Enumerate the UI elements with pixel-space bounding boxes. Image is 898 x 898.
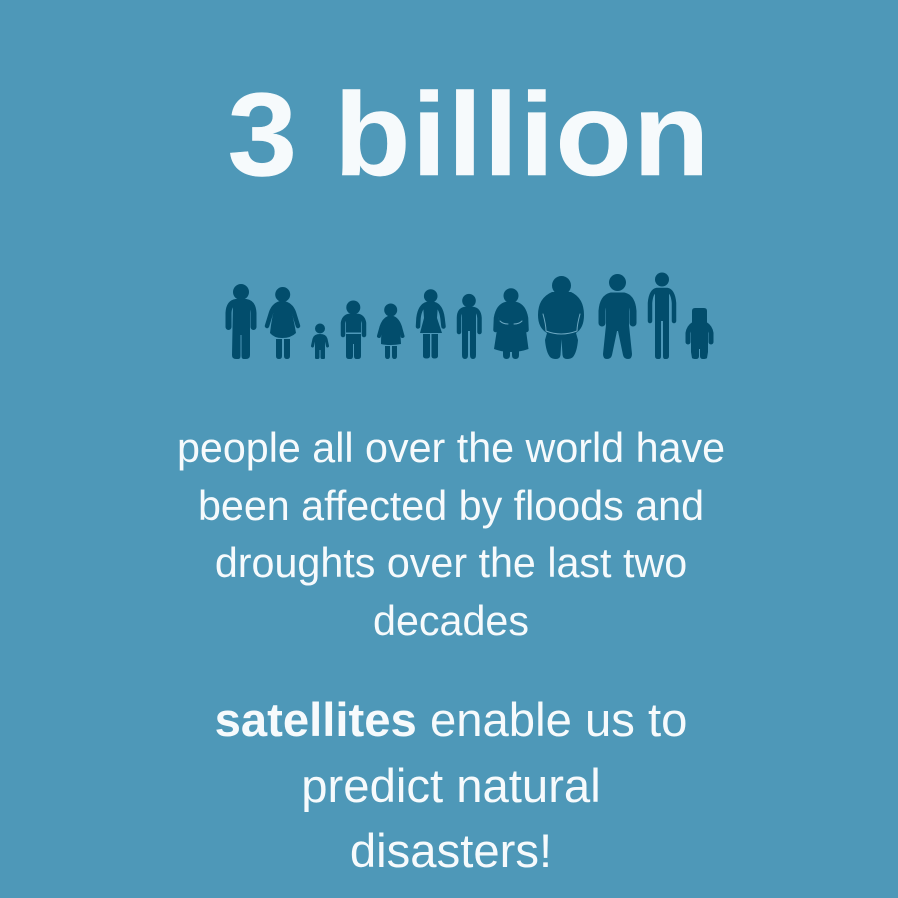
text block: satellites: satellites enable us to [215, 694, 687, 747]
text block: description: been affected by floods and [198, 482, 704, 528]
text block: description: people all over the world have [177, 425, 725, 471]
text block: description [177, 425, 725, 644]
icon: large man [538, 276, 584, 359]
icon: toddler [312, 324, 328, 359]
text block: description: droughts over the last two [215, 540, 687, 586]
icon: broad man [602, 274, 633, 359]
icon: woman in skirt [418, 289, 444, 358]
title: 3 billion [227, 69, 710, 201]
icon: girl [379, 304, 402, 359]
text block: satellites: predict natural [301, 760, 601, 813]
text block: description: decades [373, 598, 529, 644]
text block: satellites: disasters! [350, 825, 552, 878]
icon: small child [688, 308, 711, 359]
icon: boy [343, 300, 364, 359]
icon: heavy woman in dress [494, 288, 528, 359]
icon: woman [267, 287, 298, 359]
icon: man [228, 284, 254, 359]
icon: slim boy [459, 294, 480, 359]
text block: satellites [215, 694, 687, 878]
icon: tall man [650, 272, 674, 359]
